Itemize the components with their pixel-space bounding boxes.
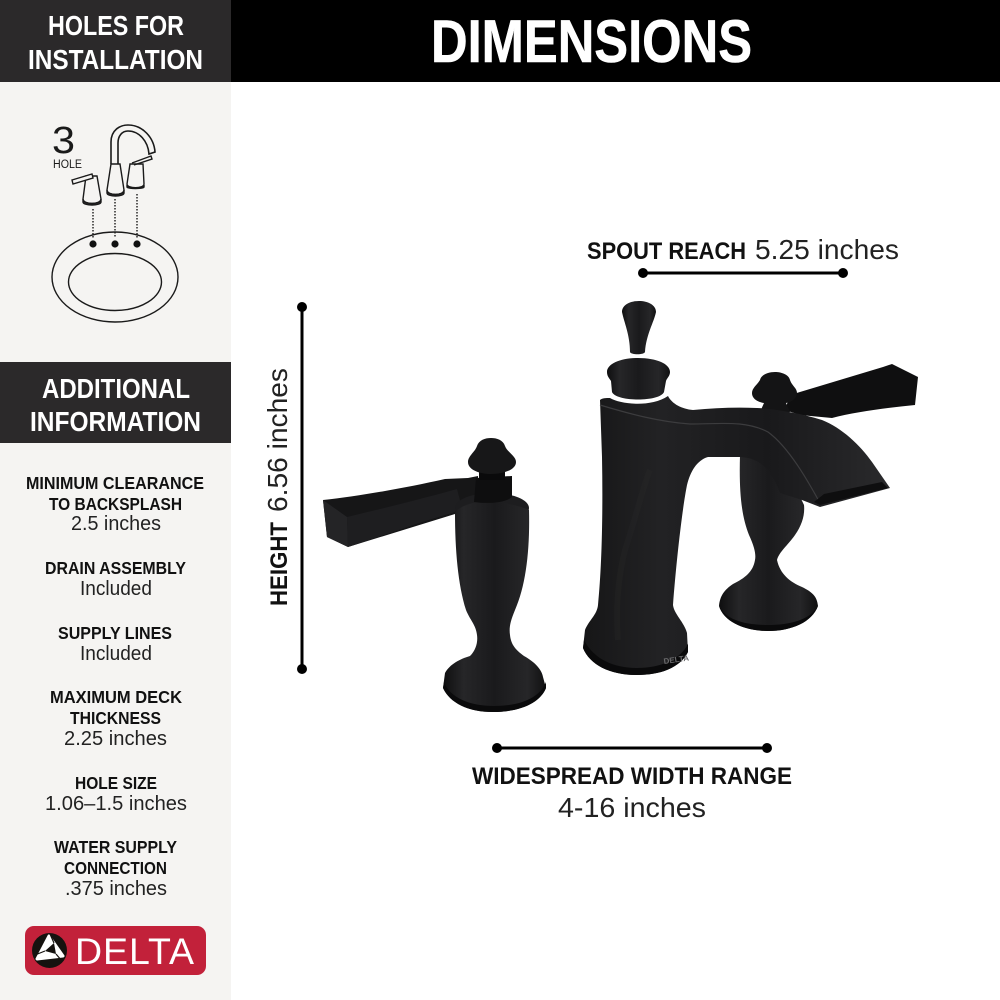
dimension: height: 6.56 inches: [262, 368, 293, 512]
spec: hole size: 1.06–1.5 inches: [45, 793, 187, 815]
spec: supply lines: SUPPLY LINES: [58, 623, 172, 643]
heading: holes for installation: HOLES FOR: [48, 10, 184, 41]
spec: minimum clearance: 2.5 inches: [71, 513, 161, 535]
spec: water supply connection: WATER SUPPLY: [54, 837, 177, 857]
spec: water supply connection: [54, 837, 177, 900]
title banner: [231, 0, 1000, 82]
heading: additional information: [0, 362, 231, 443]
spec: hole size: [45, 773, 187, 815]
spec: maximum deck thickness: THICKNESS: [70, 708, 161, 728]
center spout faucet with lift rod: DELTA: [663, 653, 690, 666]
spec: drain assembly: [45, 558, 186, 600]
heading: holes for installation: [0, 0, 231, 82]
spec: water supply connection: CONNECTION: [64, 858, 167, 878]
heading: additional information: ADDITIONAL: [42, 373, 190, 404]
center spout faucet with lift rod: [583, 301, 890, 675]
title banner: DIMENSIONS: [431, 8, 752, 75]
logo: Delta: [25, 926, 206, 975]
dimension: spout reach: [587, 234, 899, 278]
icon: 3 hole faucet and sink diagram: [52, 120, 178, 322]
dimension: spout reach: 5.25 inches: [755, 234, 899, 265]
dimension: widespread width range: 4-16 inches: [558, 792, 706, 823]
dimension: widespread width range: [472, 743, 792, 823]
spec: maximum deck thickness: 2.25 inches: [64, 728, 167, 750]
dimension: height: [262, 302, 307, 674]
left handle: [323, 438, 546, 712]
sidebar panel: [0, 0, 231, 1000]
spec: maximum deck thickness: [50, 687, 182, 750]
dimension: spout reach: SPOUT REACH: [587, 238, 746, 265]
spec: drain assembly: Included: [80, 578, 152, 600]
spec: minimum clearance: [26, 473, 204, 535]
icon: 3 hole faucet and sink diagram: 3: [52, 120, 75, 162]
spec: maximum deck thickness: MAXIMUM DECK: [50, 687, 182, 707]
dimension: widespread width range: WIDESPREAD WIDTH RANGE: [472, 763, 792, 790]
heading: additional information: INFORMATION: [30, 406, 201, 437]
spec: drain assembly: DRAIN ASSEMBLY: [45, 558, 186, 578]
dimension: height: HEIGHT: [266, 522, 293, 606]
spec: supply lines: [58, 623, 172, 665]
spec: minimum clearance: MINIMUM CLEARANCE: [26, 473, 204, 493]
spec: supply lines: Included: [80, 643, 152, 665]
spec: water supply connection: .375 inches: [65, 878, 167, 900]
right handle: [719, 364, 918, 631]
heading: holes for installation: INSTALLATION: [28, 44, 203, 75]
logo: Delta: DELTA: [75, 930, 194, 972]
spec: minimum clearance: TO BACKSPLASH: [49, 494, 182, 514]
icon: 3 hole faucet and sink diagram: HOLE: [53, 159, 82, 171]
spec: hole size: HOLE SIZE: [75, 773, 157, 793]
